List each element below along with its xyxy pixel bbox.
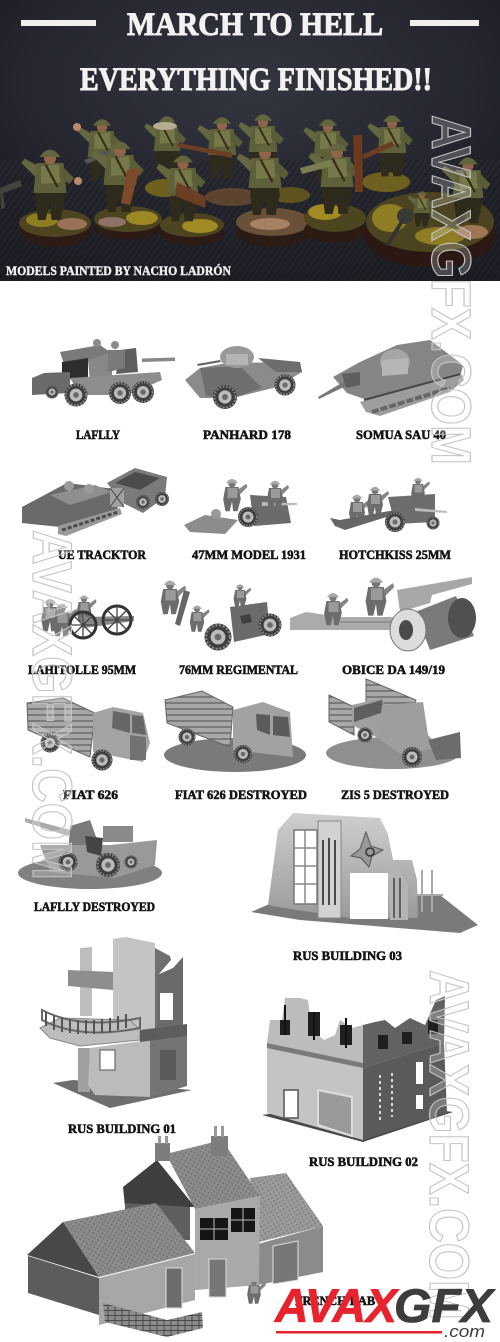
subtitle: Everything Finished: EVERYTHING FINISHED!! xyxy=(80,62,432,98)
model: Rus Building 02 xyxy=(262,996,453,1142)
label: Fiat 626 Destroyed: FIAT 626 DESTROYED xyxy=(175,787,307,802)
farm stone wall xyxy=(103,1303,203,1337)
model: UE Tracktor xyxy=(22,468,169,536)
label: Obice da 149/19: OBICE DA 149/19 xyxy=(342,662,445,677)
title: March to Hell: MARCH TO HELL xyxy=(127,7,383,43)
watermark: left: AVAXGFX.COM xyxy=(21,530,84,880)
farm central house xyxy=(123,1126,260,1297)
watermark: top right: AVAXGFX.COM xyxy=(420,115,483,465)
logo: AVAXGFX: .com xyxy=(444,1322,485,1341)
label: UE Tracktor: UE TRACKTOR xyxy=(58,547,147,562)
label: Fiat 626: FIAT 626 xyxy=(63,787,119,802)
model: Somua SAU 40 xyxy=(318,340,464,416)
label: Rus Building 02: RUS BUILDING 02 xyxy=(309,1154,418,1169)
logo: AVAXGFX xyxy=(274,1279,496,1341)
label: Rus Building 01: RUS BUILDING 01 xyxy=(68,1121,176,1136)
model: Panhard 178 xyxy=(185,346,302,409)
label: Laffly Destroyed: LAFLLY DESTROYED xyxy=(34,899,155,914)
label: ZIS 5 Destroyed: ZIS 5 DESTROYED xyxy=(341,787,449,802)
logo: AVAXGFX: GFX xyxy=(394,1279,496,1332)
model: Rus Building 03 ruined wall xyxy=(251,813,478,933)
logo: AVAXGFX: AVAX xyxy=(274,1279,400,1332)
label: Somua SAU 40: SOMUA SAU 40 xyxy=(356,427,446,442)
model: Rus Building 01 xyxy=(40,937,192,1108)
painted miniatures group xyxy=(0,114,496,267)
front row bases xyxy=(19,192,496,267)
label: Lahitolle 95mm: LAHITOLLE 95MM xyxy=(28,662,136,677)
model: 47mm Model 1931 xyxy=(184,479,297,534)
model: French farmhouse xyxy=(27,1126,323,1337)
farm back wing xyxy=(250,1173,323,1285)
label: Hotchkiss 25mm: HOTCHKISS 25MM xyxy=(339,547,451,562)
model: Fiat 626 xyxy=(27,698,150,770)
farm miniature soldier xyxy=(247,1279,266,1304)
farm front wing xyxy=(27,1203,195,1325)
model: Laffly xyxy=(32,339,175,406)
front row soldiers xyxy=(0,135,490,246)
photo credit: MODELS PAINTED BY NACHO LADRÓN xyxy=(6,263,232,278)
label: hidden farm name: FRENCH LAB xyxy=(295,1293,375,1308)
label: Panhard 178: PANHARD 178 xyxy=(203,427,292,442)
label: 76mm Regimental: 76MM REGIMENTAL xyxy=(179,662,298,677)
label: 47mm Model 1931: 47MM MODEL 1931 xyxy=(192,547,306,562)
model: Laffly Destroyed xyxy=(18,818,162,889)
model: Fiat 626 Destroyed xyxy=(164,691,306,772)
back row soldiers xyxy=(73,114,413,180)
model: ZIS 5 Destroyed xyxy=(326,679,461,769)
model: Obice da 149/19 xyxy=(290,577,476,651)
back row bases xyxy=(145,172,410,206)
model: Hotchkiss 25mm xyxy=(330,478,447,532)
panel: hero photo banner xyxy=(0,0,500,281)
label: Rus Building 03: RUS BUILDING 03 xyxy=(293,948,402,963)
model: 76mm Regimental xyxy=(161,581,282,650)
model: Lahitolle 95mm xyxy=(41,595,134,638)
label: Laffly: LAFLLY xyxy=(76,427,121,442)
title: March to Hell xyxy=(21,7,479,43)
